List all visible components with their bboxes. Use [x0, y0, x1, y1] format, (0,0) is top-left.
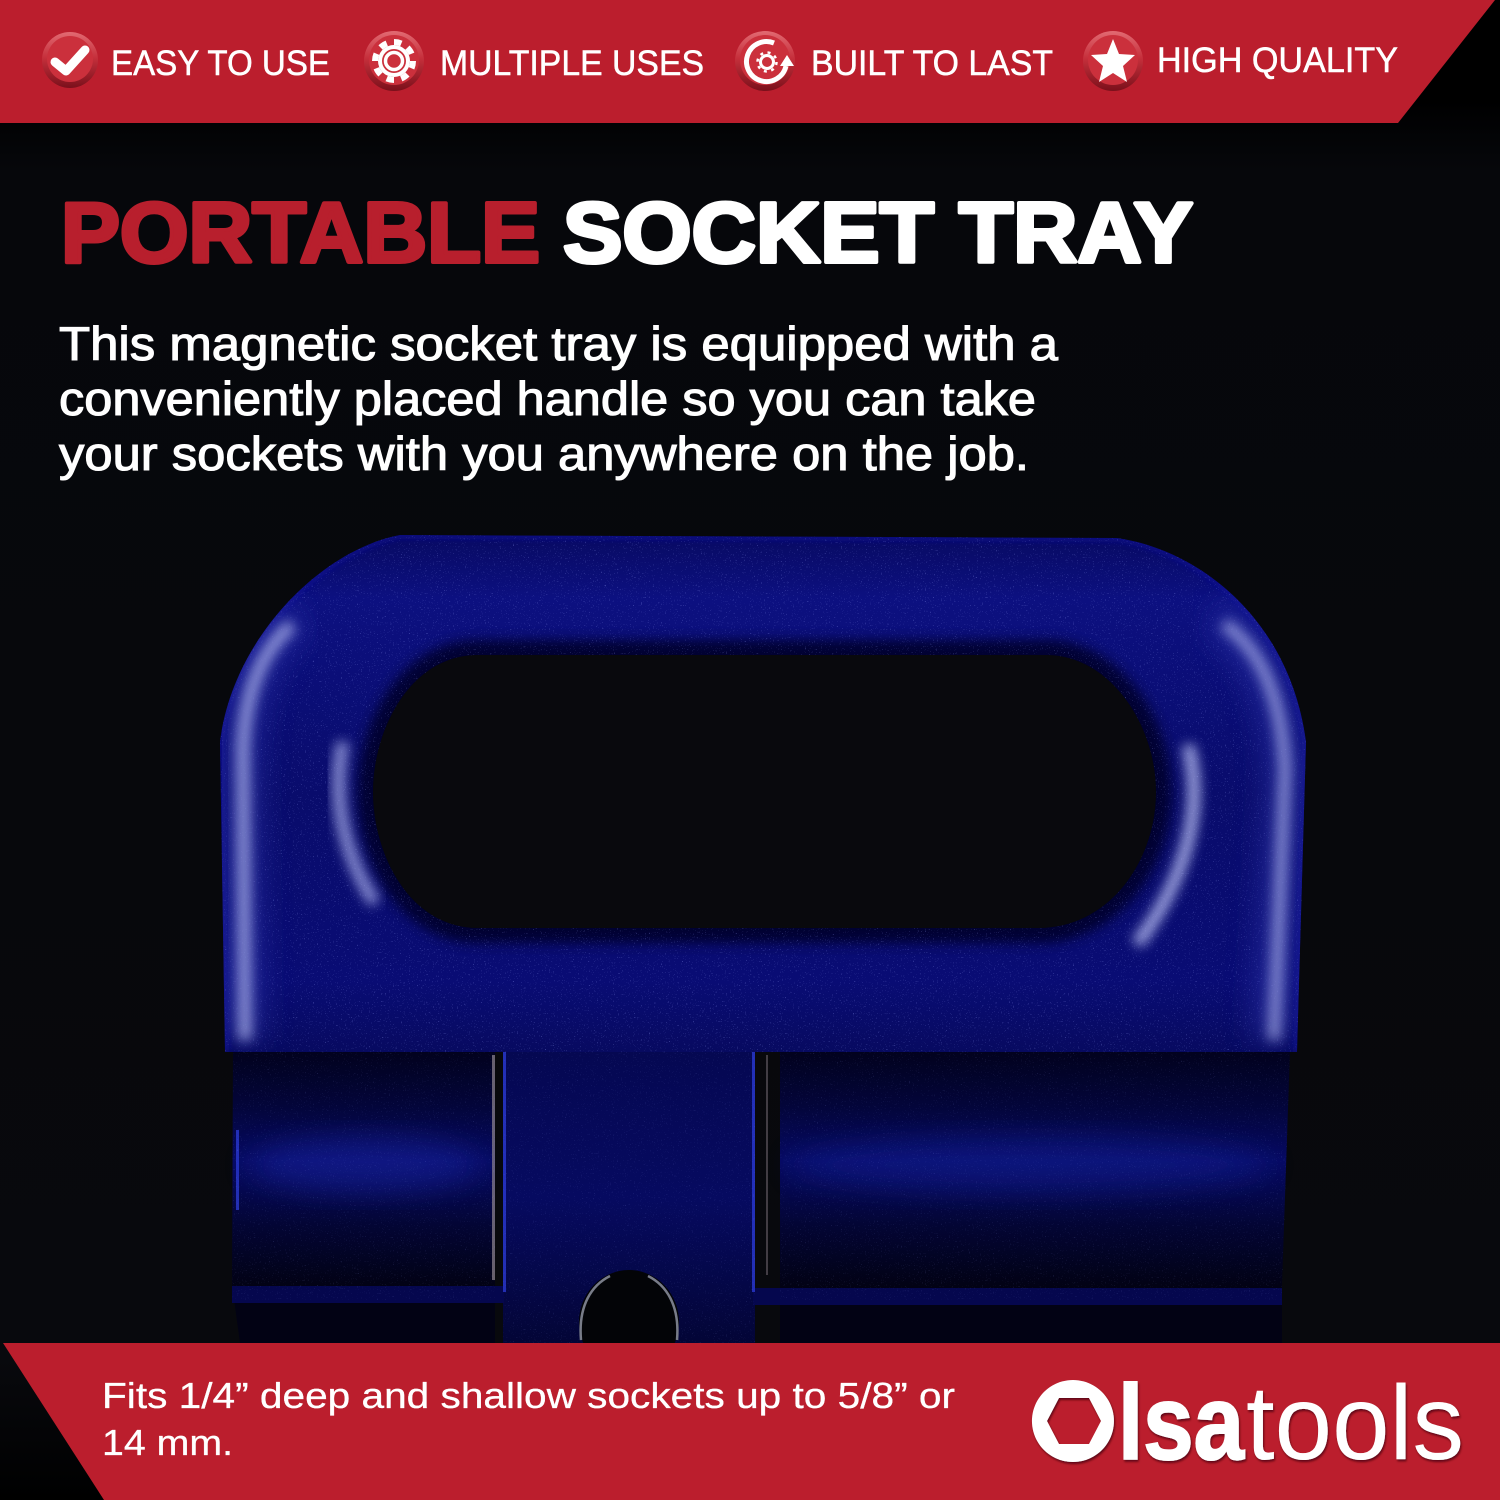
panel highlights — [250, 1137, 480, 1193]
logo: Olsatools — [1032, 1364, 1464, 1482]
magnet screw — [579, 1270, 679, 1374]
handle shading and highlights — [220, 530, 1310, 1055]
footnote text: Fits 1/4” deep and shallow sockets up to 5/8” or — [102, 1375, 955, 1416]
bottom banner — [3, 1343, 1500, 1500]
body text: conveniently placed handle so you can take — [59, 372, 1036, 425]
metal edge lines — [492, 1055, 768, 1280]
tray lower right panel — [780, 1050, 1290, 1343]
label: multiple uses: MULTIPLE USES — [440, 44, 704, 83]
title: PORTABLE — [61, 186, 540, 281]
tray centre column — [503, 1050, 755, 1343]
logo: Olsatools: tools — [1246, 1364, 1464, 1482]
label: high quality: HIGH QUALITY — [1157, 41, 1398, 80]
icon: gear with arrow — [735, 31, 795, 91]
photo: blue socket tray handle — [220, 530, 1310, 1374]
tray lower rim band — [232, 1286, 1282, 1305]
badge: easy to use — [42, 32, 330, 88]
badge: high quality — [1083, 31, 1398, 91]
top banner — [0, 0, 1495, 123]
icon: star — [1083, 31, 1143, 91]
icon: check — [42, 32, 98, 88]
tray lower left panel — [232, 1050, 495, 1343]
body text: This magnetic socket tray is equipped with a — [59, 317, 1059, 370]
title: SOCKET TRAY — [563, 186, 1193, 281]
title — [61, 186, 1193, 281]
logo wordmark: lsa — [1118, 1364, 1245, 1482]
badge: multiple uses — [364, 31, 704, 91]
badge: built to last — [735, 31, 1053, 91]
logo hex socket O — [1032, 1380, 1114, 1462]
label: built to last: BUILT TO LAST — [811, 44, 1053, 83]
label: easy to use: EASY TO USE — [111, 44, 330, 83]
body text: your sockets with you anywhere on the job. — [59, 427, 1029, 480]
icon: gear — [364, 31, 424, 91]
handle opening — [373, 655, 1156, 928]
panel speckle — [232, 1052, 1290, 1343]
handle — [220, 535, 1306, 1052]
column highlights — [236, 1052, 755, 1292]
footnote text — [102, 1375, 955, 1463]
footnote text: 14 mm. — [102, 1422, 233, 1463]
body text — [59, 317, 1059, 480]
